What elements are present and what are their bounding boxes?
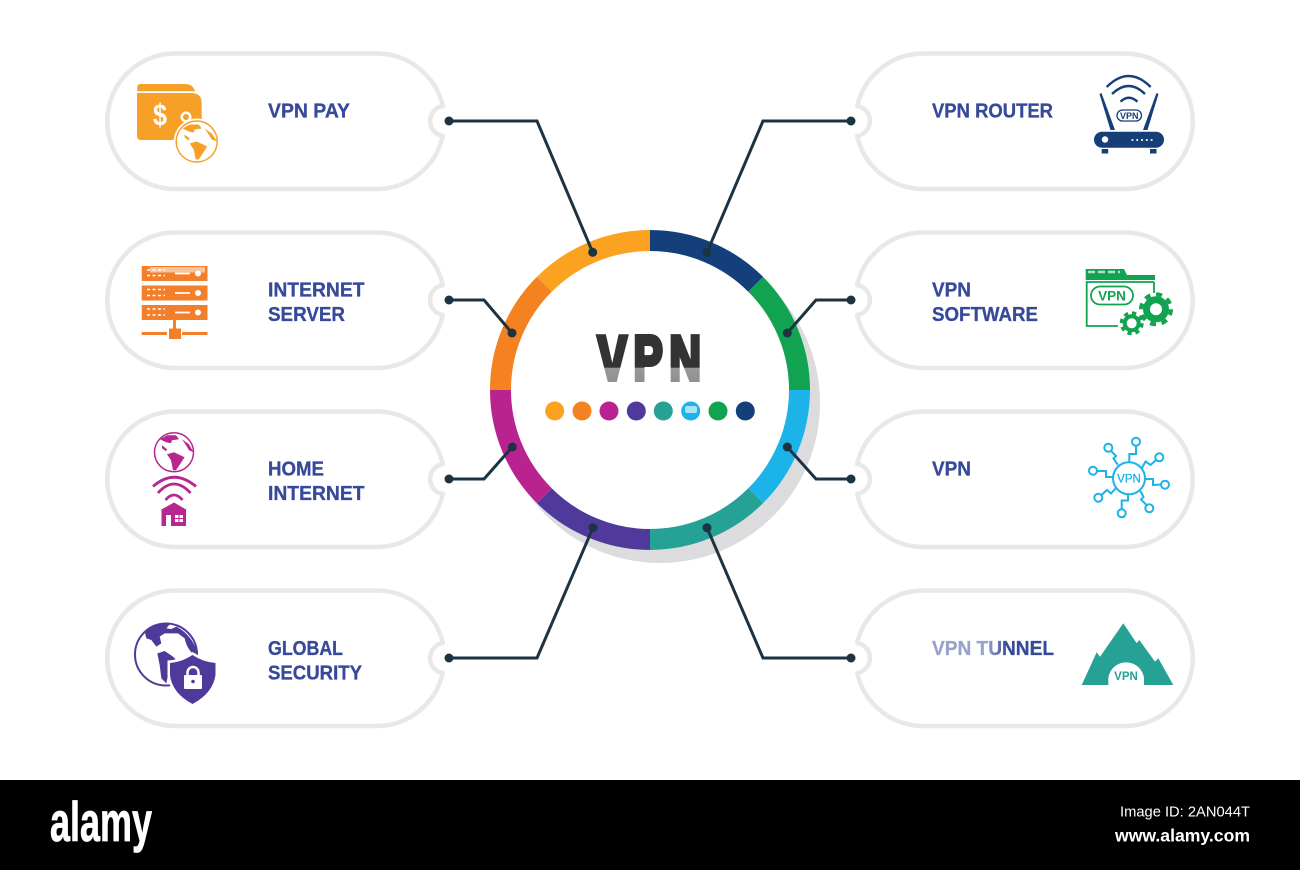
icon: wallet and globe: $ xyxy=(153,97,167,132)
icon: VPN network hub: VPN xyxy=(1117,474,1141,486)
icon: mountain tunnel: VPN xyxy=(1114,671,1138,683)
icon: router: VPN xyxy=(1120,111,1139,121)
label: GLOBAL SECURITY xyxy=(268,638,363,684)
connector: VPN xyxy=(783,442,856,484)
footer url: www.alamy.com xyxy=(1114,826,1250,846)
label: GLOBAL SECURITY: SECURITY xyxy=(268,662,363,684)
panel: Internet Server xyxy=(107,232,443,368)
footer logo: alamy: alamy xyxy=(50,790,152,853)
label: INTERNET SERVER: INTERNET xyxy=(268,279,364,301)
connector: VPN Tunnel xyxy=(702,523,856,662)
icon: wallet and globe xyxy=(137,84,220,164)
connector: Internet Server xyxy=(444,296,516,338)
label: VPN: VPN xyxy=(932,458,971,480)
panel: VPN xyxy=(857,412,1193,547)
label: INTERNET SERVER: SERVER xyxy=(268,304,346,326)
title: VPN: VPN xyxy=(598,325,701,393)
panel: Home Internet xyxy=(107,412,443,547)
icon: server rack xyxy=(142,266,208,339)
colour dots row xyxy=(545,402,755,420)
label: VPN ROUTER: VPN ROUTER xyxy=(932,100,1054,122)
panel: VPN Router xyxy=(857,54,1193,189)
connector: VPN Router xyxy=(702,116,856,257)
icon: mountain tunnel xyxy=(1082,623,1173,685)
panel: VPN Pay xyxy=(107,54,443,189)
panel: Global Security xyxy=(107,590,443,726)
label: HOME INTERNET xyxy=(268,458,364,505)
icon: VPN network hub xyxy=(1089,438,1169,517)
label: VPN SOFTWARE: VPN xyxy=(932,279,971,301)
icon: globe and shield xyxy=(135,624,218,706)
footer bar xyxy=(0,780,1300,870)
panel: VPN Software xyxy=(857,232,1193,368)
icon: software window and gears: VPN xyxy=(1098,288,1126,304)
connector: VPN Software xyxy=(783,296,856,338)
label: VPN SOFTWARE xyxy=(932,279,1038,326)
label: VPN SOFTWARE: SOFTWARE xyxy=(932,304,1038,326)
icon: home wifi and globe xyxy=(153,433,196,526)
label: GLOBAL SECURITY: GLOBAL xyxy=(268,638,343,660)
label: VPN TUNNEL: VPN TUNNEL xyxy=(932,638,1054,660)
label: HOME INTERNET: HOME xyxy=(268,458,324,480)
label: INTERNET SERVER xyxy=(268,279,364,326)
icon: router xyxy=(1094,76,1164,154)
connector: Global Security xyxy=(444,523,598,662)
icon: software window and gears xyxy=(1086,269,1171,334)
footer image id: Image ID: 2AN044T xyxy=(1120,804,1250,820)
label: VPN PAY: VPN PAY xyxy=(268,100,351,122)
central ring xyxy=(490,230,820,563)
panel: VPN Tunnel xyxy=(857,590,1193,726)
label: HOME INTERNET: INTERNET xyxy=(268,483,364,505)
connector: VPN Pay xyxy=(444,116,597,257)
connector: Home Internet xyxy=(444,442,517,484)
